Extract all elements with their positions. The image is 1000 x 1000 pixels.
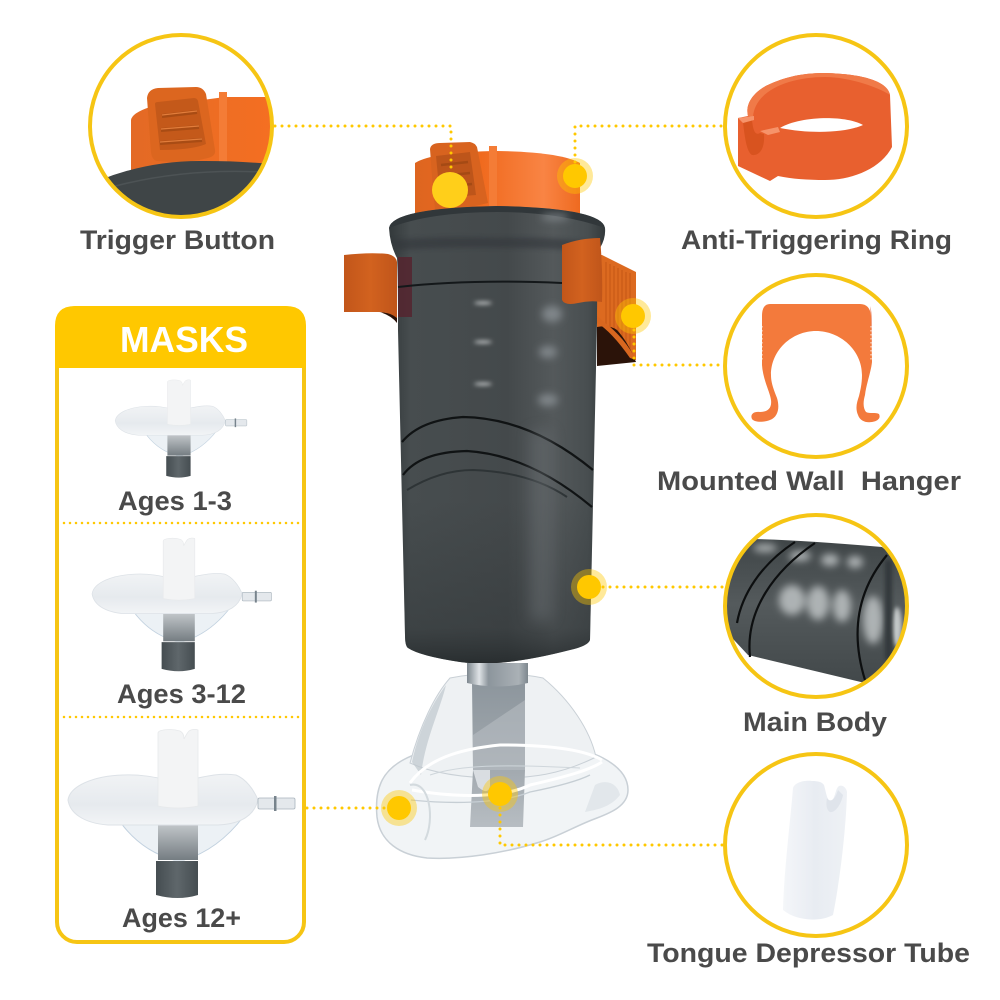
marker: masks	[381, 790, 417, 826]
anti-triggering ring on device	[415, 151, 580, 214]
label: main body: Main Body	[743, 707, 887, 737]
heading: masks: MASKS	[120, 319, 248, 360]
panel header	[55, 306, 306, 368]
label: tongue depressor tube: Tongue Depressor Tube	[647, 938, 970, 968]
label: anti-triggering ring: Anti-Triggering Ring	[681, 225, 952, 255]
panel: masks	[55, 306, 306, 942]
wall hanger back and shadow	[562, 255, 636, 366]
mask: ages 12+	[68, 729, 295, 898]
trigger button on device	[430, 142, 497, 210]
label: mounted wall hanger: Mounted Wall Hanger	[657, 466, 962, 496]
mask: ages 3-12	[92, 538, 271, 671]
breathing mask on device	[377, 663, 628, 858]
leader line: main body	[589, 586, 724, 588]
marker: tongue depressor tube	[482, 776, 518, 812]
label: ages 1-3: Ages 1-3	[118, 486, 232, 516]
leader line: anti-triggering ring	[575, 126, 724, 176]
leader line: masks	[307, 806, 399, 810]
leader line: trigger button	[275, 126, 451, 185]
left clip	[344, 253, 397, 323]
marker: main body	[571, 569, 607, 605]
callout: tongue depressor tube detail	[725, 754, 907, 936]
label: ages 3-12: Ages 3-12	[117, 679, 246, 709]
leader line: wall hanger	[634, 316, 723, 365]
leader line: tongue depressor tube	[500, 794, 724, 845]
marker: wall hanger	[615, 298, 651, 334]
callout: mounted wall hanger detail	[725, 275, 907, 457]
right clip	[562, 238, 602, 304]
label: trigger button: Trigger Button	[80, 225, 275, 255]
product: full device	[344, 142, 636, 858]
marker: anti-triggering ring	[557, 158, 593, 194]
marker: trigger button	[432, 172, 468, 208]
main body	[385, 206, 610, 670]
callout: anti-triggering ring detail	[725, 35, 907, 217]
label: ages 12+: Ages 12+	[122, 903, 241, 933]
callout: main body detail	[720, 515, 915, 697]
mask: ages 1-3	[115, 380, 247, 478]
callout: trigger button detail	[80, 35, 280, 225]
